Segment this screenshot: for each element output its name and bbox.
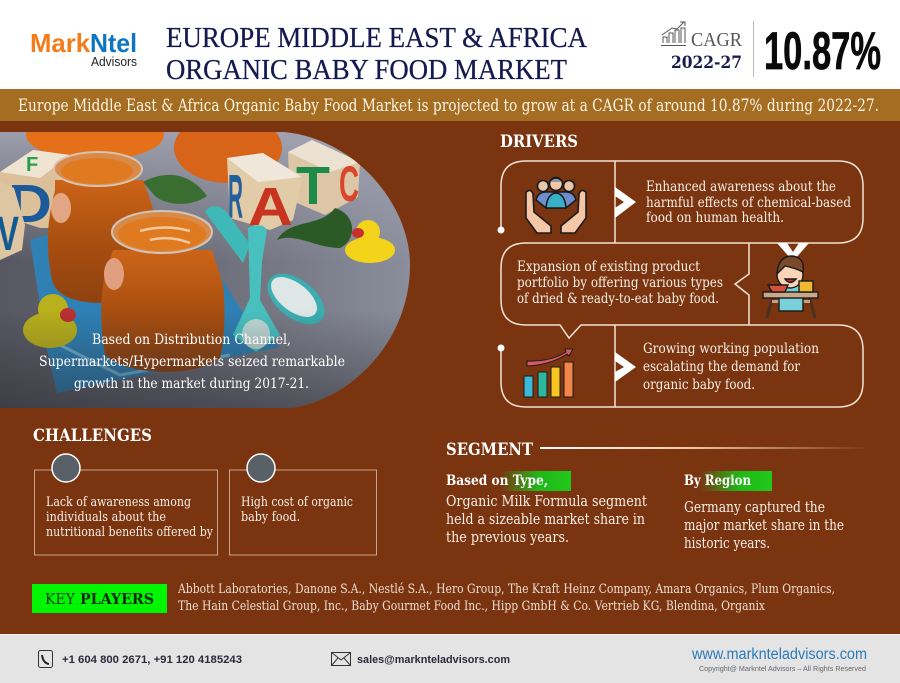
icon: rising bar chart xyxy=(524,349,573,397)
key players badge: PLAYERS xyxy=(80,590,154,608)
CAGR label: CAGR xyxy=(691,30,742,51)
photo panel: baby food jars: F xyxy=(26,154,38,176)
email: sales@marknteladvisors.com xyxy=(357,654,510,666)
segment by type: Based on Type, xyxy=(446,473,548,489)
back jar xyxy=(48,180,153,303)
driver text 2 xyxy=(517,259,723,307)
key players xyxy=(32,582,835,614)
segment by region: historic years. xyxy=(684,536,770,552)
challenge card 1: Lack of awareness among xyxy=(46,495,191,510)
driver text 2: Expansion of existing product xyxy=(517,259,701,275)
panel: segment xyxy=(446,440,870,552)
chevrons xyxy=(615,187,809,382)
summary banner xyxy=(0,89,900,121)
block V xyxy=(0,182,25,260)
driver text 1: food on human health. xyxy=(646,210,784,226)
challenge card 1: nutritional benefits offered by xyxy=(46,525,214,540)
challenge card 2: baby food. xyxy=(241,510,300,525)
driver text 3 xyxy=(643,341,819,393)
ducks xyxy=(345,220,395,263)
driver text 1: Enhanced awareness about the xyxy=(646,179,836,195)
segment by region: By Region xyxy=(684,473,751,489)
driver text 3: escalating the demand for xyxy=(643,359,800,375)
photo caption xyxy=(39,332,345,392)
key players list: The Hain Celestial Group, Inc., Baby Gourmet Food Inc., Hipp GmbH & Co. Vertrieb KG, Blendina, Organix xyxy=(178,599,766,614)
spoons xyxy=(205,206,250,263)
logo: Mark xyxy=(30,28,91,58)
segment by type: the previous years. xyxy=(446,530,569,546)
panel: drivers xyxy=(498,132,863,407)
title xyxy=(166,22,587,86)
segment by region: major market share in the xyxy=(684,518,844,534)
photo caption: Supermarkets/Hypermarkets seized remarkable xyxy=(39,354,345,370)
heading: drivers: DRIVERS xyxy=(500,132,578,151)
key players badge xyxy=(32,584,167,613)
challenge card 1 xyxy=(34,454,218,555)
copyright: Copyright@ Markntel Advisors – All Rights Reserved xyxy=(699,666,866,673)
footer xyxy=(0,634,900,683)
driver text 3: Growing working population xyxy=(643,341,819,357)
napkin xyxy=(30,233,280,393)
photo caption: Based on Distribution Channel, xyxy=(92,332,291,348)
icon: hands holding people xyxy=(526,178,586,233)
logo: Ntel xyxy=(90,28,137,58)
heading rule xyxy=(540,447,870,449)
block RA xyxy=(227,153,302,230)
key players badge: KEY xyxy=(45,590,76,608)
photo panel: baby food jars xyxy=(0,132,410,408)
segment by type: held a sizeable market share in xyxy=(446,512,645,528)
driver text 2: portfolio by offering various types xyxy=(517,275,723,291)
outline dots xyxy=(498,226,504,352)
website: www.marknteladvisors.com xyxy=(691,646,867,663)
front jar xyxy=(101,250,224,372)
leaves xyxy=(143,175,207,204)
photo panel: baby food jars: C xyxy=(339,156,359,212)
CAGR label: 2022-27 xyxy=(671,53,742,72)
photo caption: growth in the market during 2017-21. xyxy=(74,376,309,392)
icon: phone xyxy=(38,650,52,668)
block D xyxy=(0,150,70,228)
challenge card 2 xyxy=(230,454,376,555)
segment by type xyxy=(446,471,647,546)
photo panel: baby food jars: R xyxy=(228,163,243,232)
driver text 3: organic baby food. xyxy=(643,377,755,393)
heading: segment: SEGMENT xyxy=(446,440,534,459)
phone numbers: +1 604 800 2671, +91 120 4185243 xyxy=(62,654,242,666)
divider xyxy=(753,21,754,77)
segment by region: Germany captured the xyxy=(684,500,825,516)
icon: baby in high chair xyxy=(763,256,818,318)
CAGR label xyxy=(671,30,742,72)
driver text 2: of dried & ready-to-eat baby food. xyxy=(517,291,719,307)
challenge card 2: High cost of organic xyxy=(241,495,353,510)
title: EUROPE MIDDLE EAST & AFRICA xyxy=(166,22,587,54)
icon: mail xyxy=(332,652,350,666)
header xyxy=(30,21,881,86)
panel: challenges xyxy=(33,426,376,555)
block TC xyxy=(288,140,360,215)
title: ORGANIC BABY FOOD MARKET xyxy=(166,54,567,86)
segment by region xyxy=(684,471,844,552)
photo panel: baby food jars: T xyxy=(296,156,330,216)
logo: Advisors xyxy=(91,55,137,69)
photo panel: baby food jars: D xyxy=(8,174,52,234)
logo xyxy=(30,28,137,69)
icon: growth chart xyxy=(661,22,686,46)
challenge card 1: individuals about the xyxy=(46,510,166,525)
driver text 1: harmful effects of chemical-based xyxy=(646,195,851,211)
connected outline xyxy=(501,161,863,407)
photo panel: baby food jars: A xyxy=(248,177,293,237)
key players list xyxy=(177,582,835,614)
page background xyxy=(0,121,900,634)
heading: challenges: CHALLENGES xyxy=(33,426,152,445)
driver text 1 xyxy=(646,179,851,226)
segment by type: Organic Milk Formula segment xyxy=(446,494,647,510)
